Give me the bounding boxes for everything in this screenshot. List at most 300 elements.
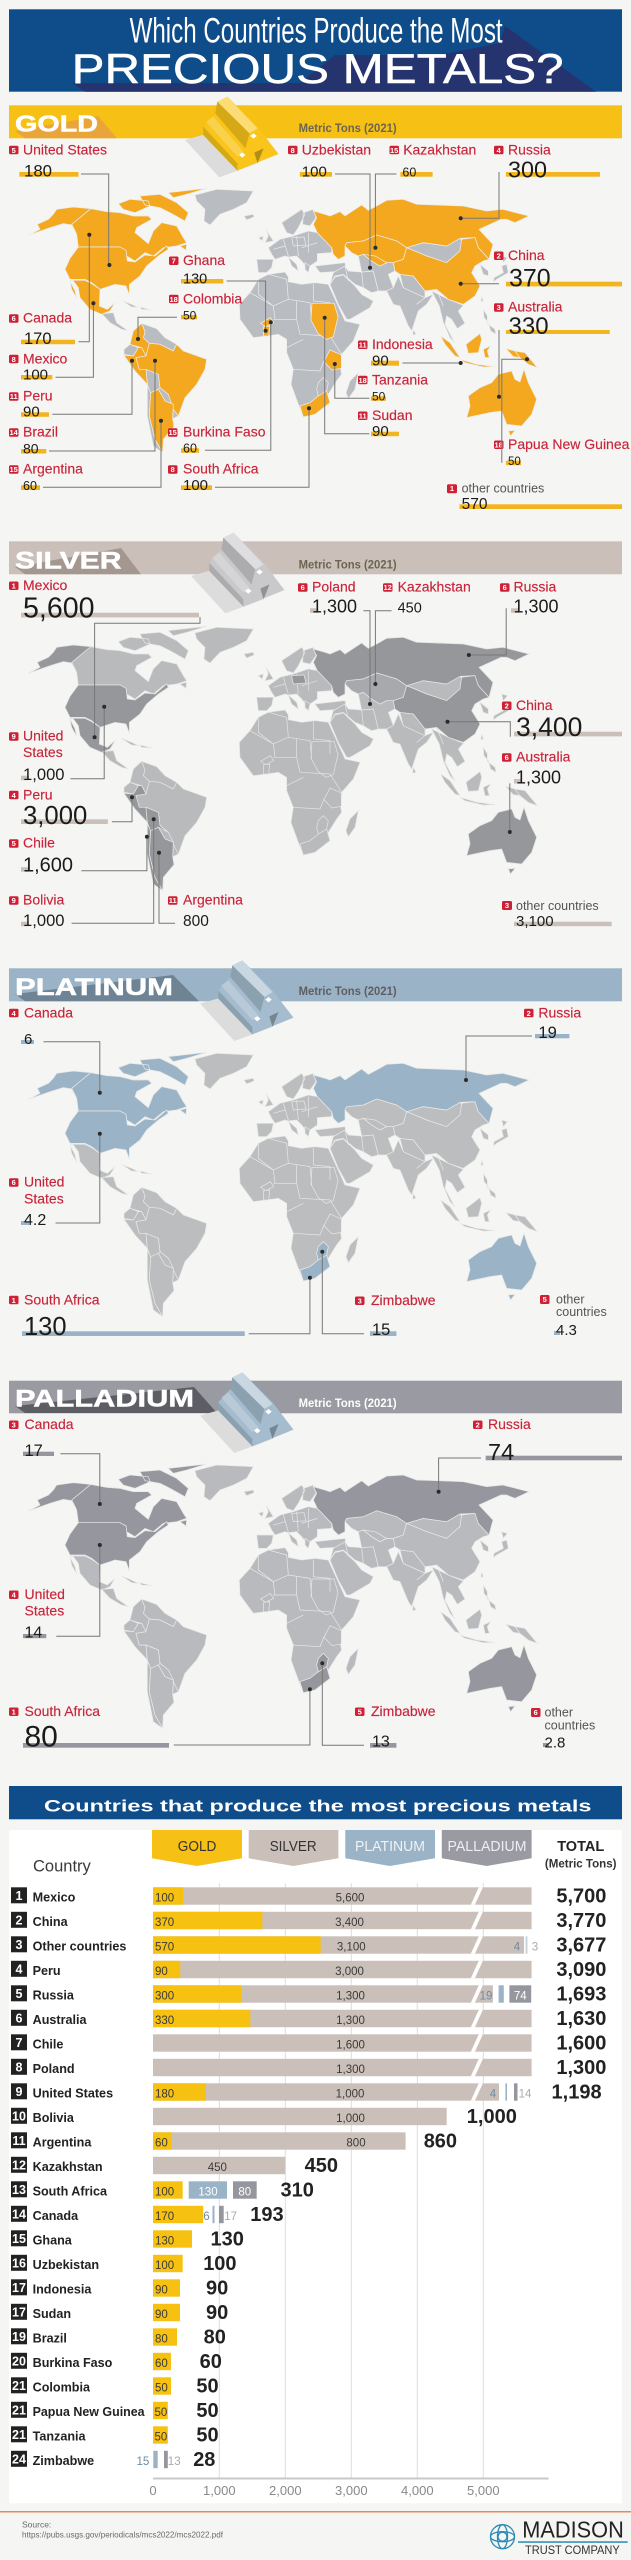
palladium callout: Russia: 2 <box>476 1420 480 1430</box>
row: Poland: 1,300 <box>336 2064 365 2076</box>
row: United States: 9 <box>16 2085 23 2099</box>
palladium world map <box>28 1464 537 1728</box>
platinum callout: Zimbabwe: Zimbabwe <box>371 1292 436 1308</box>
platinum callout: United States: United <box>24 1174 64 1190</box>
gold callout: Papua New Guinea: 50 <box>508 456 521 468</box>
row: Uzbekistan: 100 <box>155 2260 174 2272</box>
gold callout: other countries: 1 <box>450 484 454 493</box>
row: Russia: 19 <box>480 1990 492 2002</box>
row: China <box>11 1910 606 1932</box>
silver callout: Argentina: 11 <box>169 896 177 905</box>
row: Australia: 6 <box>16 2011 23 2025</box>
platinum callout: other countries: 5 <box>543 1295 547 1304</box>
palladium header <box>9 1381 622 1413</box>
gold callout: Colombia <box>136 290 242 341</box>
gold callout: Indonesia: Indonesia <box>372 336 433 352</box>
source note: Source: <box>22 2520 51 2530</box>
chart grid and axis: 2,000 <box>269 2483 302 2498</box>
row: Other countries: 3,100 <box>337 1941 366 1953</box>
column header: Silver: SILVER <box>270 1839 317 1855</box>
gold callout: Peru: 90 <box>23 404 40 421</box>
row: Other countries: 3 <box>532 1941 538 1953</box>
gold callout: South Africa: 8 <box>171 465 175 474</box>
row: United States: 1,000 <box>336 2088 364 2100</box>
row: Mexico: 100 <box>155 1892 174 1904</box>
palladium callout: other countries: other <box>544 1706 573 1720</box>
platinum callout: Zimbabwe: 15 <box>372 1321 390 1339</box>
row: South Africa: South Africa <box>33 2185 108 2199</box>
row: Canada: 6 <box>203 2211 210 2223</box>
row: Argentina: 11 <box>12 2134 26 2148</box>
palladium callout: Russia <box>437 1416 622 1494</box>
row: Chile: 7 <box>16 2036 23 2050</box>
gold callout: China: 370 <box>509 265 551 293</box>
silver callout: Bolivia: 9 <box>12 896 16 905</box>
row: South Africa: 100 <box>155 2186 174 2198</box>
platinum callout: United States: States <box>24 1191 64 1207</box>
palladium callout: South Africa <box>9 1687 312 1754</box>
row: Papua New Guinea: 21 <box>12 2403 26 2417</box>
row: South Africa: 130 <box>198 2186 218 2198</box>
row: Russia: 5 <box>16 1987 23 2001</box>
silver callout: Argentina <box>157 851 243 930</box>
row: Peru: 3,090 <box>556 1959 606 1981</box>
gold header <box>9 105 622 138</box>
gold callout: Sudan: 11 <box>359 412 367 420</box>
silver callout: Argentina: Argentina <box>183 892 243 908</box>
palladium callout: other countries: countries <box>544 1718 595 1732</box>
palladium callout: United States: 14 <box>24 1625 42 1642</box>
silver callout: China <box>446 697 622 742</box>
row: Papua New Guinea: 50 <box>196 2400 219 2422</box>
gold callout: Australia: Australia <box>508 299 563 315</box>
gold callout: Burkina Faso: Burkina Faso <box>183 424 266 440</box>
chart grid and axis: 0 <box>149 2483 157 2498</box>
silver header <box>9 541 622 574</box>
gold callout: Argentina: 60 <box>23 479 37 493</box>
gold callout: China <box>459 247 622 293</box>
row: Tanzania: 21 <box>12 2428 26 2442</box>
platinum header <box>9 968 622 1001</box>
silver callout: Australia: Australia <box>516 749 571 765</box>
chart grid and axis: 1,000 <box>203 2483 236 2498</box>
gold callout: Ghana: 130 <box>183 271 207 287</box>
gold callout: Uzbekistan: 8 <box>291 146 295 155</box>
row: Kazakhstan: Kazakhstan <box>33 2160 103 2174</box>
platinum callout: other countries: 4.3 <box>556 1322 577 1339</box>
row: Indonesia <box>11 2277 228 2299</box>
row: Uzbekistan <box>11 2253 237 2275</box>
palladium callout: Canada: 3 <box>12 1420 16 1430</box>
chart grid and axis <box>149 1883 548 2498</box>
platinum world map <box>28 1052 537 1317</box>
gold callout: Burkina Faso: 15 <box>169 428 177 437</box>
row: China: 3,400 <box>335 1917 364 1929</box>
silver callout: Chile <box>9 835 149 877</box>
gold callout: United States <box>9 141 111 267</box>
row: Sudan <box>11 2302 228 2324</box>
gold callout: Colombia: Colombia <box>183 290 242 306</box>
row: China: 370 <box>155 1917 174 1929</box>
row: Burkina Faso: 20 <box>12 2354 26 2368</box>
silver callout: Russia <box>467 579 559 657</box>
silver callout: Mexico <box>9 577 200 739</box>
row: Colombia <box>11 2375 219 2397</box>
row: Zimbabwe: 24 <box>12 2452 26 2466</box>
platinum callout: Zimbabwe <box>320 1250 436 1339</box>
platinum callout: Russia <box>464 1004 581 1082</box>
gold callout: Australia: 330 <box>508 313 549 340</box>
silver callout: Chile: 5 <box>12 839 16 848</box>
row: Other countries: 4 <box>514 1941 521 1953</box>
platinum callout: Canada: Canada <box>24 1004 73 1020</box>
row: United States: 1,198 <box>552 2081 602 2103</box>
silver callout: Chile: 1,600 <box>23 855 73 877</box>
platinum callout: Canada: 6 <box>24 1031 32 1048</box>
chart grid and axis: 5,000 <box>467 2483 500 2498</box>
silver header: SILVER <box>15 547 122 574</box>
row: Indonesia: 90 <box>155 2284 168 2296</box>
row: Other countries: 3 <box>16 1938 23 1952</box>
row: Colombia: 50 <box>155 2382 168 2394</box>
silver callout: Australia: 6 <box>505 753 509 762</box>
row: Chile: Chile <box>33 2038 63 2052</box>
platinum callout: other countries: countries <box>556 1305 607 1319</box>
row: United States: 180 <box>155 2088 174 2100</box>
gold callout: Mexico: Mexico <box>23 350 68 366</box>
column header: Silver <box>249 1830 338 1866</box>
row: Kazakhstan: 12 <box>12 2158 26 2172</box>
source note <box>22 2520 224 2540</box>
platinum callout: United States <box>9 1132 102 1229</box>
gold callout: Uzbekistan: Uzbekistan <box>302 141 371 157</box>
row: Colombia: 21 <box>12 2379 26 2393</box>
gold callout: Uzbekistan: 100 <box>302 164 327 181</box>
column header: Total: (Metric Tons) <box>545 1859 617 1871</box>
row: Colombia: Colombia <box>33 2381 91 2395</box>
platinum callout: other countries: other <box>556 1292 584 1306</box>
row: Peru: Peru <box>33 1964 61 1978</box>
palladium callout: other countries: 6 <box>534 1708 538 1717</box>
row: Mexico <box>11 1885 606 1907</box>
row: Australia: Australia <box>33 2013 87 2027</box>
row: United States <box>11 2081 602 2103</box>
row: Argentina <box>11 2130 457 2152</box>
row: Zimbabwe <box>11 2449 215 2471</box>
row: United States: 14 <box>519 2088 532 2100</box>
row: United States: United States <box>33 2087 113 2101</box>
row: Other countries: Other countries <box>33 1940 126 1954</box>
row: Ghana: 15 <box>12 2232 26 2246</box>
row: Sudan: 90 <box>206 2302 228 2324</box>
silver callout: United States: United <box>23 728 63 744</box>
row: Other countries: 570 <box>155 1941 174 1953</box>
row: Papua New Guinea <box>11 2400 219 2422</box>
platinum callout: South Africa: South Africa <box>24 1291 100 1307</box>
column header: Total: TOTAL <box>557 1839 604 1855</box>
row: Kazakhstan: 450 <box>208 2162 227 2174</box>
gold callout: Tanzania: 18 <box>359 376 367 385</box>
row: Uzbekistan: 16 <box>12 2256 26 2270</box>
platinum callout: South Africa: 130 <box>24 1313 67 1341</box>
row: Canada: 170 <box>155 2211 174 2223</box>
silver callout: Bolivia <box>9 817 156 930</box>
row: Sudan: 17 <box>12 2305 26 2319</box>
row: Peru <box>11 1959 606 1981</box>
row: Other countries <box>11 1934 606 1956</box>
silver callout: Russia: 1,300 <box>514 597 559 617</box>
platinum callout: Canada: 4 <box>12 1009 17 1018</box>
palladium callout: Zimbabwe: 5 <box>358 1708 362 1716</box>
column header: Gold: GOLD <box>178 1839 216 1855</box>
silver callout: Russia: 6 <box>503 583 507 592</box>
gold callout: South Africa: South Africa <box>183 461 259 477</box>
row: Sudan: 90 <box>155 2309 168 2321</box>
row: Canada: 14 <box>12 2207 26 2221</box>
row: Ghana: 130 <box>210 2228 244 2250</box>
row: Bolivia: 10 <box>12 2109 26 2123</box>
gold callout: other countries: other countries <box>462 482 544 496</box>
row: Russia: 1,693 <box>556 1983 606 2005</box>
chart grid and axis: 3,000 <box>335 2483 368 2498</box>
row: Zimbabwe: 15 <box>137 2456 149 2468</box>
silver callout: Kazakhstan <box>373 579 471 686</box>
gold callout: Kazakhstan <box>373 141 476 250</box>
silver callout: Kazakhstan: 12 <box>384 583 392 592</box>
row: Mexico: 1 <box>16 1889 23 1903</box>
row: Ghana: 130 <box>155 2235 174 2247</box>
silver callout: China: 2 <box>505 702 509 710</box>
row: Argentina: 60 <box>155 2137 168 2149</box>
gold callout: Russia: 300 <box>508 157 547 183</box>
platinum callout: Russia: 19 <box>538 1024 557 1042</box>
row: Zimbabwe: 13 <box>168 2456 181 2468</box>
row: Burkina Faso: 60 <box>200 2351 222 2373</box>
gold callout: Sudan: Sudan <box>372 407 412 423</box>
gold callout: Tanzania: Tanzania <box>372 371 428 387</box>
gold callout: United States: United States <box>23 141 107 157</box>
gold callout: United States: 5 <box>12 146 16 155</box>
panel: ranking bar chart <box>9 1830 622 2503</box>
palladium callout: South Africa: South Africa <box>24 1703 100 1719</box>
platinum callout: United States: 4.2 <box>24 1212 46 1229</box>
row: Indonesia: 17 <box>12 2281 26 2295</box>
row: Brazil: 80 <box>204 2326 226 2348</box>
silver callout: other countries <box>502 899 612 930</box>
silver callout: other countries: 3 <box>505 901 509 910</box>
silver callout: Peru <box>9 786 134 830</box>
gold callout: Russia <box>459 141 600 220</box>
platinum callout: Zimbabwe: 3 <box>358 1296 362 1306</box>
panel: platinum <box>9 960 622 1341</box>
row: Kazakhstan <box>11 2155 338 2177</box>
column header: Palladium: PALLADIUM <box>448 1839 526 1855</box>
palladium callout: Canada: 17 <box>24 1442 43 1460</box>
row: Colombia: 50 <box>196 2375 219 2397</box>
row: Poland: 8 <box>16 2060 23 2074</box>
platinum callout: South Africa: 1 <box>12 1296 16 1305</box>
platinum callout: United States: 6 <box>12 1178 16 1187</box>
palladium callout: United States: States <box>24 1602 64 1618</box>
silver callout: Australia: 1,300 <box>516 767 561 787</box>
gold callout: Sudan: 90 <box>372 423 389 440</box>
gold callout: Uzbekistan <box>288 141 372 270</box>
row: Kazakhstan: 450 <box>305 2155 338 2177</box>
silver callout: Peru: 3,000 <box>23 802 87 830</box>
gold callout: other countries: 570 <box>462 496 488 513</box>
row: Mexico: Mexico <box>33 1891 76 1905</box>
gold callout: Argentina <box>9 419 163 493</box>
gold callout: Indonesia: 90 <box>372 353 389 370</box>
gold callout: Canada <box>9 233 91 348</box>
silver world map <box>28 626 537 891</box>
row: Bolivia <box>11 2106 517 2128</box>
row: South Africa: 80 <box>238 2186 251 2198</box>
gold callout: Tanzania: 50 <box>372 390 386 404</box>
palladium callout: other countries: 2.8 <box>544 1734 565 1751</box>
gold callout: Papua New Guinea: 18 <box>495 440 503 450</box>
gold callout: Peru: Peru <box>23 388 53 404</box>
silver callout: Kazakhstan: 450 <box>398 601 422 617</box>
row: Russia: 300 <box>155 1990 174 2002</box>
row: China: 2 <box>16 1913 23 1927</box>
gold callout: United States: 180 <box>24 162 52 181</box>
row: Indonesia: 90 <box>206 2277 228 2299</box>
gold callout: China: 2 <box>497 252 501 260</box>
gold callout: Burkina Faso: 60 <box>183 442 197 456</box>
silver callout: Australia <box>502 749 571 834</box>
gold header: Metric Tons (2021) <box>299 123 397 135</box>
column header: Palladium <box>442 1830 532 1866</box>
title banner <box>9 9 622 92</box>
gold callout: Kazakhstan: 15 <box>390 146 398 155</box>
row: Ghana <box>11 2228 244 2250</box>
title banner: PRECIOUS METALS? <box>72 45 564 92</box>
silver callout: Argentina: 800 <box>183 913 209 930</box>
row: Russia: Russia <box>33 1989 75 2003</box>
row: Chile <box>11 2032 606 2054</box>
row: Zimbabwe: Zimbabwe <box>33 2454 94 2468</box>
silver callout: China: China <box>516 697 553 713</box>
row: Poland: Poland <box>33 2062 75 2076</box>
gold callout: Canada: 170 <box>24 330 52 348</box>
panel: gold <box>9 97 630 513</box>
column header: Platinum: PLATINUM <box>355 1839 425 1855</box>
row: South Africa: 310 <box>280 2179 314 2201</box>
icon: gold bars <box>185 97 278 177</box>
row: Brazil: 80 <box>155 2333 168 2345</box>
gold callout: Peru: 11 <box>10 392 18 401</box>
palladium header: PALLADIUM <box>15 1386 194 1413</box>
gold callout: Papua New Guinea <box>494 357 630 468</box>
gold callout: Canada: 6 <box>12 314 16 323</box>
row: Bolivia: 1,000 <box>336 2113 365 2125</box>
palladium callout: Russia: Russia <box>488 1416 531 1432</box>
platinum callout: Russia: 2 <box>527 1009 531 1018</box>
gold callout: Kazakhstan: 60 <box>402 166 416 180</box>
row: South Africa: 13 <box>12 2183 26 2197</box>
row: Zimbabwe: 28 <box>193 2449 215 2471</box>
row: Poland <box>11 2057 606 2079</box>
row: Peru: 4 <box>16 1962 23 1976</box>
row: Uzbekistan: 100 <box>203 2253 237 2275</box>
gold callout: Ghana: Ghana <box>183 252 225 268</box>
gold callout: Brazil: 14 <box>10 428 19 437</box>
platinum header: Metric Tons (2021) <box>299 986 397 998</box>
gold callout: Australia <box>494 299 610 399</box>
row: Australia: 330 <box>155 2015 174 2027</box>
palladium callout: other countries <box>531 1706 595 1751</box>
gold callout: Papua New Guinea: Papua New Guinea <box>508 436 630 452</box>
gold callout: Ghana: 7 <box>172 256 176 266</box>
gold callout: Argentina: Argentina <box>23 461 83 477</box>
gold callout: Australia: 3 <box>497 303 501 312</box>
icon: palladium bars <box>200 1372 293 1453</box>
row: Russia: 74 <box>514 1990 527 2002</box>
row: Tanzania: 50 <box>196 2424 219 2446</box>
icon: silver bars <box>191 533 284 613</box>
gold callout: Mexico: 100 <box>23 366 48 383</box>
silver callout: Poland <box>298 579 372 706</box>
row: Russia <box>11 1983 606 2005</box>
gold callout: Brazil: Brazil <box>23 424 58 440</box>
palladium callout: Zimbabwe: 13 <box>372 1734 390 1751</box>
row: Papua New Guinea: 50 <box>154 2407 167 2419</box>
row: Bolivia: 1,000 <box>467 2106 517 2128</box>
silver header: Metric Tons (2021) <box>299 559 397 571</box>
footer rule <box>0 2511 631 2512</box>
row: China: China <box>33 1915 69 1929</box>
silver callout: Mexico: Mexico <box>23 577 68 593</box>
silver callout: United States: States <box>23 744 63 760</box>
silver callout: Bolivia: 1,000 <box>23 911 65 930</box>
chart grid and axis: 4,000 <box>401 2483 434 2498</box>
gold callout: Colombia: 50 <box>183 308 197 322</box>
platinum callout: Canada <box>9 1004 102 1095</box>
row: Canada: Canada <box>33 2209 79 2223</box>
palladium callout: South Africa: 80 <box>24 1721 58 1754</box>
chart heading <box>9 1786 622 1819</box>
silver callout: Poland: 1,300 <box>312 597 357 617</box>
row: Bolivia: Bolivia <box>33 2111 75 2125</box>
column header: Country: Country <box>33 1858 92 1876</box>
gold callout: South Africa: 100 <box>183 477 208 494</box>
platinum header: PLATINUM <box>15 974 173 1001</box>
row: China: 3,770 <box>556 1910 606 1932</box>
silver callout: Peru: 4 <box>12 791 17 800</box>
platinum callout: other countries <box>540 1292 607 1339</box>
silver callout: Mexico: 1 <box>12 582 16 590</box>
row: Burkina Faso: 60 <box>155 2358 168 2370</box>
panel: palladium <box>9 1372 622 1754</box>
logo: Madison Trust Company: MADISON <box>522 2517 624 2543</box>
row: Australia: 1,300 <box>336 2015 365 2027</box>
palladium callout: Zimbabwe <box>320 1661 436 1751</box>
gold callout: Canada: Canada <box>23 310 72 326</box>
gold callout: Brazil: 80 <box>23 440 39 456</box>
row: Other countries: 3,677 <box>556 1934 606 1956</box>
silver callout: other countries: 3,100 <box>516 913 554 930</box>
gold callout: China: China <box>508 247 545 263</box>
silver callout: United States: 1,000 <box>23 765 65 784</box>
gold callout: other countries <box>447 482 622 513</box>
row: Burkina Faso <box>11 2351 222 2373</box>
row: Peru: 90 <box>155 1966 168 1978</box>
gold callout: Kazakhstan: Kazakhstan <box>403 141 476 157</box>
palladium callout: South Africa: 1 <box>12 1708 16 1716</box>
silver callout: Mexico: 5,600 <box>23 593 95 625</box>
gold callout: Peru <box>9 359 134 421</box>
